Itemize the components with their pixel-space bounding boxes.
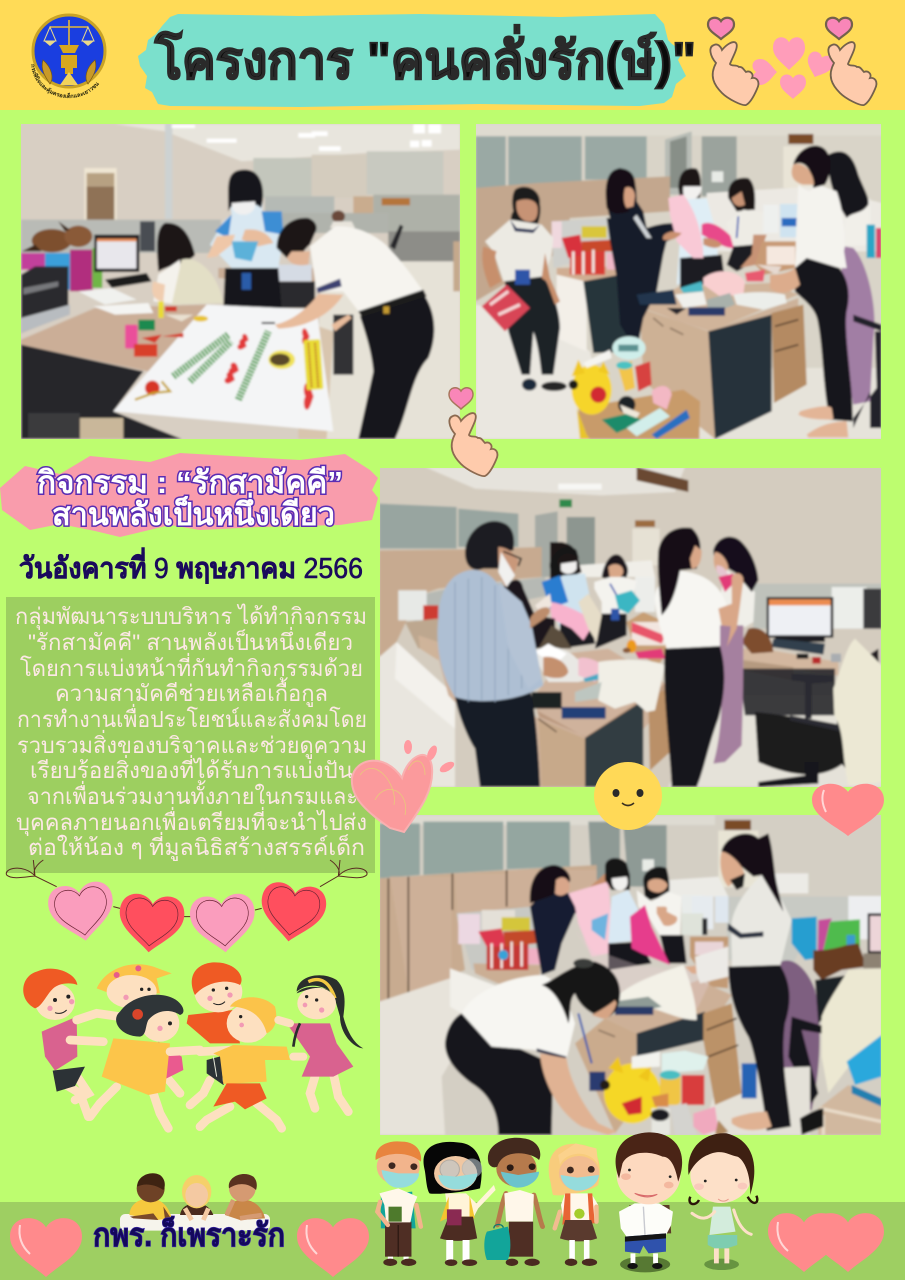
description text: จากเพื่อนร่วมงานทั้งภายในกรมและ bbox=[27, 780, 358, 809]
photo: making the sign board bbox=[15, 118, 465, 443]
kid: boy in yellow shirt bbox=[213, 1045, 290, 1084]
kid: blonde girl behind bbox=[97, 964, 172, 993]
description text: "รักสามัคคี" สานพลังเป็นหนึ่งเดียว bbox=[28, 626, 353, 655]
photo: sorting donated items bbox=[470, 118, 885, 443]
icon: smiley face bbox=[594, 762, 662, 830]
heading text: กิจกรรม : “รักสามัคคี” bbox=[37, 465, 343, 500]
kid: big girl in mint outfit bbox=[688, 1133, 757, 1270]
kid: girl with apple bbox=[549, 1143, 600, 1266]
description text: บุคคลภายนอกเพื่อเตรียมที่จะนำไปส่ง bbox=[16, 806, 367, 836]
icon: finger hearts bbox=[708, 18, 876, 105]
header band bbox=[0, 0, 905, 110]
kid: girl with glasses bbox=[424, 1142, 496, 1266]
description text: การทำงานเพื่อประโยชน์และสังคมโดย bbox=[17, 703, 367, 732]
footer slogan: กพร. ก็เพราะรัก bbox=[93, 1215, 285, 1253]
bunting of hearts bbox=[6, 860, 367, 955]
description text: รวบรวมสิ่งของบริจาคและช่วยดูความ bbox=[17, 729, 367, 759]
description text: ความสามัคคีช่วยเหลือเกื้อกูล bbox=[55, 677, 328, 707]
kid: girl in yellow dress bbox=[158, 1042, 183, 1080]
kid: boy with green book bbox=[376, 1141, 421, 1266]
photo: woman reaching for box of donations bbox=[375, 810, 890, 1140]
illustration: children holding hands bbox=[23, 962, 363, 1128]
logo emblem: กรมพินิจและคุ้มครองเด็กและเยาวชน bbox=[30, 64, 99, 98]
logo emblem bbox=[30, 14, 106, 98]
description text bbox=[15, 603, 367, 861]
date: วันอังคารที่ 9 พฤษภาคม 2566 bbox=[19, 547, 363, 585]
kid: big boy in blue shorts bbox=[616, 1132, 682, 1272]
illustration: three children leaning on sign bbox=[120, 1173, 270, 1231]
icon: footer hearts left bbox=[10, 1218, 369, 1277]
kid: boy in pink shirt bbox=[42, 1017, 77, 1071]
heading text bbox=[37, 465, 343, 532]
description text: กลุ่มพัฒนาระบบบริหาร ได้ทำกิจกรรม bbox=[15, 603, 367, 630]
panel: description bbox=[6, 597, 375, 873]
icon: finger heart between photos bbox=[449, 388, 497, 476]
title: โครงการ "คนคลั่งรัก(ษ์)" bbox=[154, 25, 696, 89]
description text: โดยการแบ่งหน้าที่กันทำกิจกรรมด้วย bbox=[20, 652, 363, 681]
illustration: children in masks bbox=[376, 1132, 757, 1272]
description text: เรียบร้อยสิ่งของที่ได้รับการแบ่งปัน bbox=[30, 754, 353, 783]
title brush backdrop bbox=[138, 14, 686, 107]
icon: footer hearts right bbox=[768, 1213, 884, 1272]
heading brush: activity name bbox=[0, 453, 378, 537]
heading text: สานพลังเป็นหนึ่งเดียว bbox=[52, 492, 335, 532]
icon: scribbled heart bbox=[352, 740, 456, 832]
footer band bbox=[0, 1202, 905, 1280]
kid: girl in pink dress bbox=[287, 1023, 353, 1077]
photo: man and women folding clothes bbox=[375, 462, 890, 792]
kid: boy with teal bag bbox=[484, 1138, 543, 1266]
kid: boy with orange hair behind bbox=[187, 1010, 240, 1043]
description text: ต่อให้น้อง ๆ ที่มูลนิธิสร้างสรรค์เด็ก bbox=[28, 831, 365, 861]
icon: pink heart right bbox=[812, 784, 884, 836]
